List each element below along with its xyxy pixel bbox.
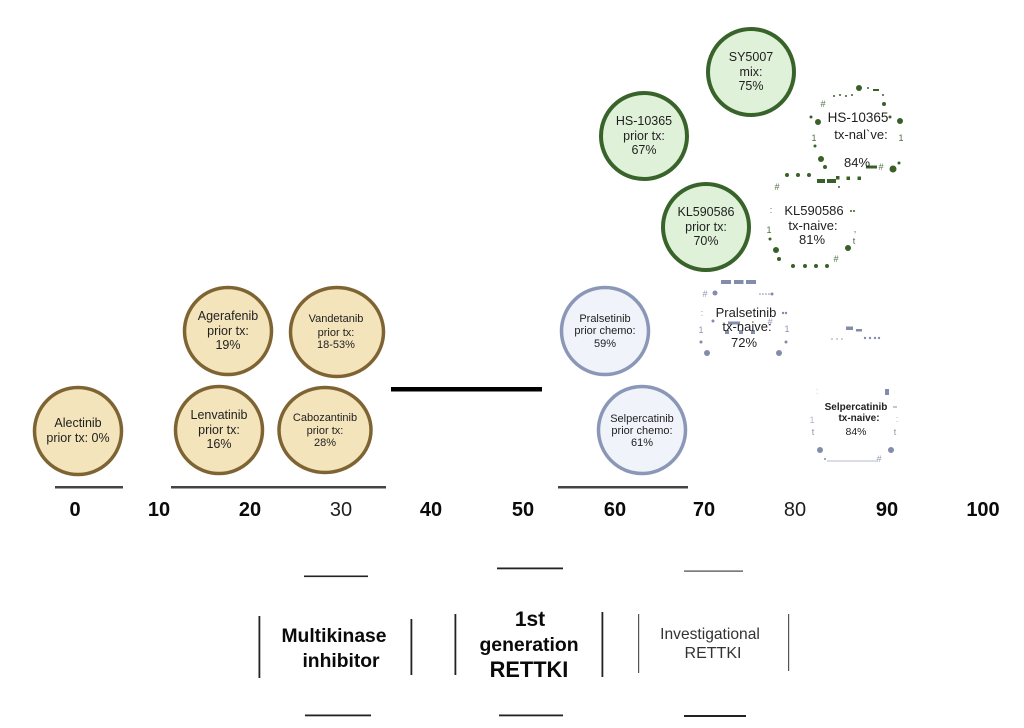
x axis scale 0 to 100: 30 [330, 499, 352, 521]
bubble: Lenvatinib prior tx 16%: prior tx: [198, 423, 240, 437]
x axis scale 0 to 100: 50 [512, 499, 534, 521]
broken bubble: Selpercatinib tx-naive 84%: # [876, 454, 882, 464]
broken bubble: HS-10365 tx-naive 84%: 84% [844, 155, 870, 170]
bubble: Lenvatinib prior tx 16%: Lenvatinib [190, 408, 248, 422]
broken bubble: Pralsetinib tx-naive 72%: # [702, 289, 708, 299]
bubble: SY5007 mix 75%: SY5007 [729, 50, 773, 64]
bubble: Selpercatinib prior chemo 61%: 61% [631, 437, 653, 449]
broken bubble: Pralsetinib tx-naive 72%: # [767, 317, 773, 327]
x axis scale 0 to 100: 100 [966, 499, 1000, 521]
broken bubble: KL590586 tx-naive 81%: tx-naive: [788, 218, 838, 233]
broken bubble: Pralsetinib tx-naive 72% [698, 280, 790, 356]
broken bubble: Selpercatinib tx-naive 84%: 84% [845, 426, 867, 438]
bubble: Selpercatinib prior chemo 61%: Selpercatinib [610, 413, 674, 425]
bubble: Alectinib prior tx 0%: prior tx: 0% [46, 431, 110, 445]
broken bubble: HS-10365 tx-naive 84%: 1 [811, 133, 817, 143]
bubble: Vandetanib prior tx 18-53% [290, 288, 384, 376]
bubble: Agerafenib prior tx 19%: 19% [215, 338, 241, 352]
bubble: Cabozantinib prior tx 28%: prior tx: [307, 425, 343, 437]
bubble: Vandetanib prior tx 18-53%: prior tx: [318, 327, 354, 339]
legend: 1st generation RETTKI: RETTKI [490, 657, 568, 682]
bubble: HS-10365 prior tx 67%: HS-10365 [616, 114, 672, 128]
bubble: SY5007 mix 75%: 75% [738, 79, 764, 93]
bubble: HS-10365 prior tx 67%: prior tx: [623, 129, 665, 143]
bubble: Cabozantinib prior tx 28% [279, 388, 371, 472]
bubble: Selpercatinib prior chemo 61% [598, 386, 686, 474]
broken bubble: KL590586 tx-naive 81% [766, 173, 861, 268]
legend: 1st generation RETTKI: generation [479, 634, 579, 656]
broken bubble: Selpercatinib tx-naive 84%: : [816, 386, 818, 396]
bubble: Lenvatinib prior tx 16%: 16% [206, 437, 232, 451]
bubble: Lenvatinib prior tx 16% [176, 386, 262, 474]
broken bubble: KL590586 tx-naive 81%: # [774, 182, 780, 192]
broken bubble: KL590586 tx-naive 81%: t [853, 236, 856, 246]
x axis scale 0 to 100: 90 [876, 499, 898, 521]
x axis scale 0 to 100: 0 [69, 499, 81, 521]
broken bubble: HS-10365 tx-naive 84%: # [878, 162, 884, 172]
range bar: 10 to 35 [171, 486, 386, 488]
x axis scale 0 to 100: 60 [604, 499, 626, 521]
bubble: KL590586 prior tx 70%: prior tx: [685, 220, 727, 234]
broken bubble: Selpercatinib tx-naive 84% [809, 386, 898, 464]
bubble: Pralsetinib prior chemo 59%: 59% [594, 338, 616, 350]
legend: Investigational RETTKI [638, 570, 789, 717]
bubble: Selpercatinib prior chemo 61%: prior chemo: [611, 425, 673, 437]
broken bubble: Selpercatinib tx-naive 84%: t [812, 427, 815, 437]
bubble: HS-10365 prior tx 67%: 67% [631, 143, 657, 157]
legend: Multikinase inhibitor: inhibitor [302, 651, 380, 672]
broken bubble: Pralsetinib tx-naive 72%: tx-naive: [722, 319, 772, 334]
broken bubble: Pralsetinib tx-naive 72%: 1 [698, 325, 704, 335]
legend: 1st generation RETTKI [454, 568, 603, 716]
bubble: KL590586 prior tx 70%: KL590586 [677, 205, 735, 219]
legend: Multikinase inhibitor [258, 576, 412, 716]
bubble: Vandetanib prior tx 18-53%: 18-53% [317, 339, 355, 351]
bubble: Alectinib prior tx 0% [34, 388, 122, 474]
bubble: Pralsetinib prior chemo 59%: prior chemo: [574, 325, 636, 337]
legend: 1st generation RETTKI: 1st [515, 608, 545, 631]
broken bubble: KL590586 tx-naive 81%: , [854, 224, 856, 234]
x axis scale 0 to 100: 80 [784, 499, 806, 521]
bubble: Alectinib prior tx 0%: Alectinib [54, 416, 102, 430]
range bar: 55 to 68 [558, 486, 688, 488]
broken bubble: Selpercatinib tx-naive 84%: 1 [809, 415, 815, 425]
x axis scale 0 to 100: 10 [148, 499, 170, 521]
bubble: Cabozantinib prior tx 28%: 28% [314, 437, 336, 449]
bubble: Agerafenib prior tx 19% [184, 288, 272, 374]
x axis scale 0 to 100 [69, 499, 1000, 521]
range bar: 0 to 5 [55, 486, 123, 488]
x axis scale 0 to 100: 20 [239, 499, 261, 521]
bubble: SY5007 mix 75%: mix: [740, 65, 762, 79]
broken bubble: HS-10365 tx-naive 84%: HS-10365 [828, 110, 888, 125]
legend: Investigational RETTKI: RETTKI [685, 645, 741, 662]
broken bubble: KL590586 tx-naive 81%: # [833, 254, 839, 264]
bubble: Agerafenib prior tx 19%: prior tx: [207, 324, 249, 338]
bubble: KL590586 prior tx 70%: 70% [693, 234, 719, 248]
broken bubble: HS-10365 tx-naive 84%: 1 [898, 133, 904, 143]
broken bubble: Pralsetinib tx-naive 72%: : [701, 308, 703, 318]
broken bubble: Selpercatinib tx-naive 84%: t [894, 427, 897, 437]
broken bubble: KL590586 tx-naive 81%: 81% [799, 232, 825, 247]
broken bubble: Selpercatinib tx-naive 84%: Selpercatinib [825, 402, 887, 413]
bubble: HS-10365 prior tx 67% [601, 93, 687, 179]
broken bubble: KL590586 tx-naive 81%: 1 [766, 225, 772, 235]
broken bubble: KL590586 tx-naive 81%: KL590586 [784, 203, 844, 218]
broken bubble: HS-10365 tx-naive 84%: # [820, 99, 826, 109]
broken bubble: Pralsetinib tx-naive 72%: Pralsetinib [716, 305, 776, 320]
broken bubble: Selpercatinib tx-naive 84%: tx-naive: [838, 413, 880, 424]
broken bubble: KL590586 tx-naive 81%: : [770, 205, 772, 215]
bubble: KL590586 prior tx 70% [663, 184, 749, 270]
bubble: Cabozantinib prior tx 28%: Cabozantinib [293, 412, 357, 424]
broken bubble: Pralsetinib tx-naive 72%: 72% [731, 335, 757, 350]
broken bubble: Pralsetinib tx-naive 72%: 1 [784, 324, 790, 334]
bubble: SY5007 mix 75% [708, 29, 794, 115]
broken bubble: Selpercatinib tx-naive 84%: : [896, 414, 898, 424]
legend: Multikinase inhibitor: Multikinase [281, 626, 387, 647]
legend: Investigational RETTKI: Investigational [660, 626, 760, 643]
stray fragments of a missing bubble [831, 326, 880, 340]
broken bubble: HS-10365 tx-naive 84% [810, 85, 904, 172]
bubble: Pralsetinib prior chemo 59%: Pralsetinib [579, 313, 631, 325]
bubble: Pralsetinib prior chemo 59% [562, 288, 648, 374]
bubble: Vandetanib prior tx 18-53%: Vandetanib [309, 313, 363, 325]
x axis scale 0 to 100: 70 [693, 499, 715, 521]
broken bubble: HS-10365 tx-naive 84%: tx-nal`ve: [834, 127, 888, 142]
x axis scale 0 to 100: 40 [420, 499, 442, 521]
bubble: Agerafenib prior tx 19%: Agerafenib [198, 309, 258, 323]
black bar: 40 to 52 [391, 387, 542, 392]
